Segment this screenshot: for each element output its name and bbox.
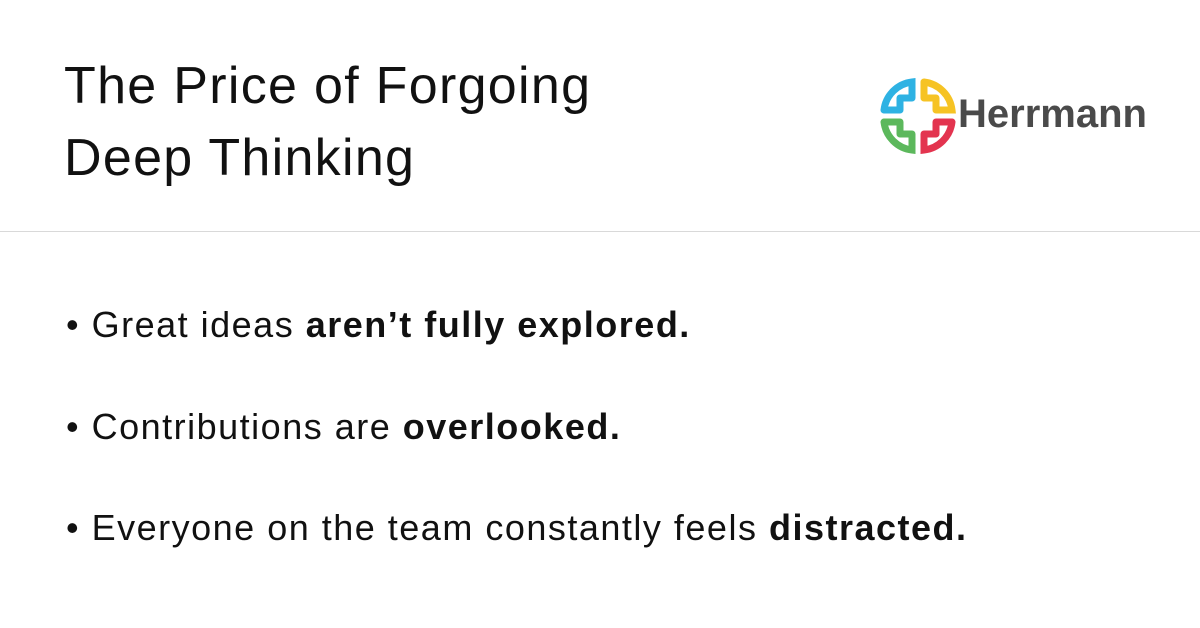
logo: Herrmann [880,78,1147,154]
title: Deep Thinking [64,129,415,187]
icon: four-colour emblem [880,78,956,154]
logo wordmark: Herrmann [958,92,1147,136]
bullet 2: • Contributions are overlooked. [66,406,621,447]
bullet 3: • Everyone on the team constantly feels distracted. [66,507,968,548]
bullet 1: • Great ideas aren’t fully explored. [66,304,691,345]
title: The Price of Forgoing [64,57,591,115]
title [64,57,591,187]
